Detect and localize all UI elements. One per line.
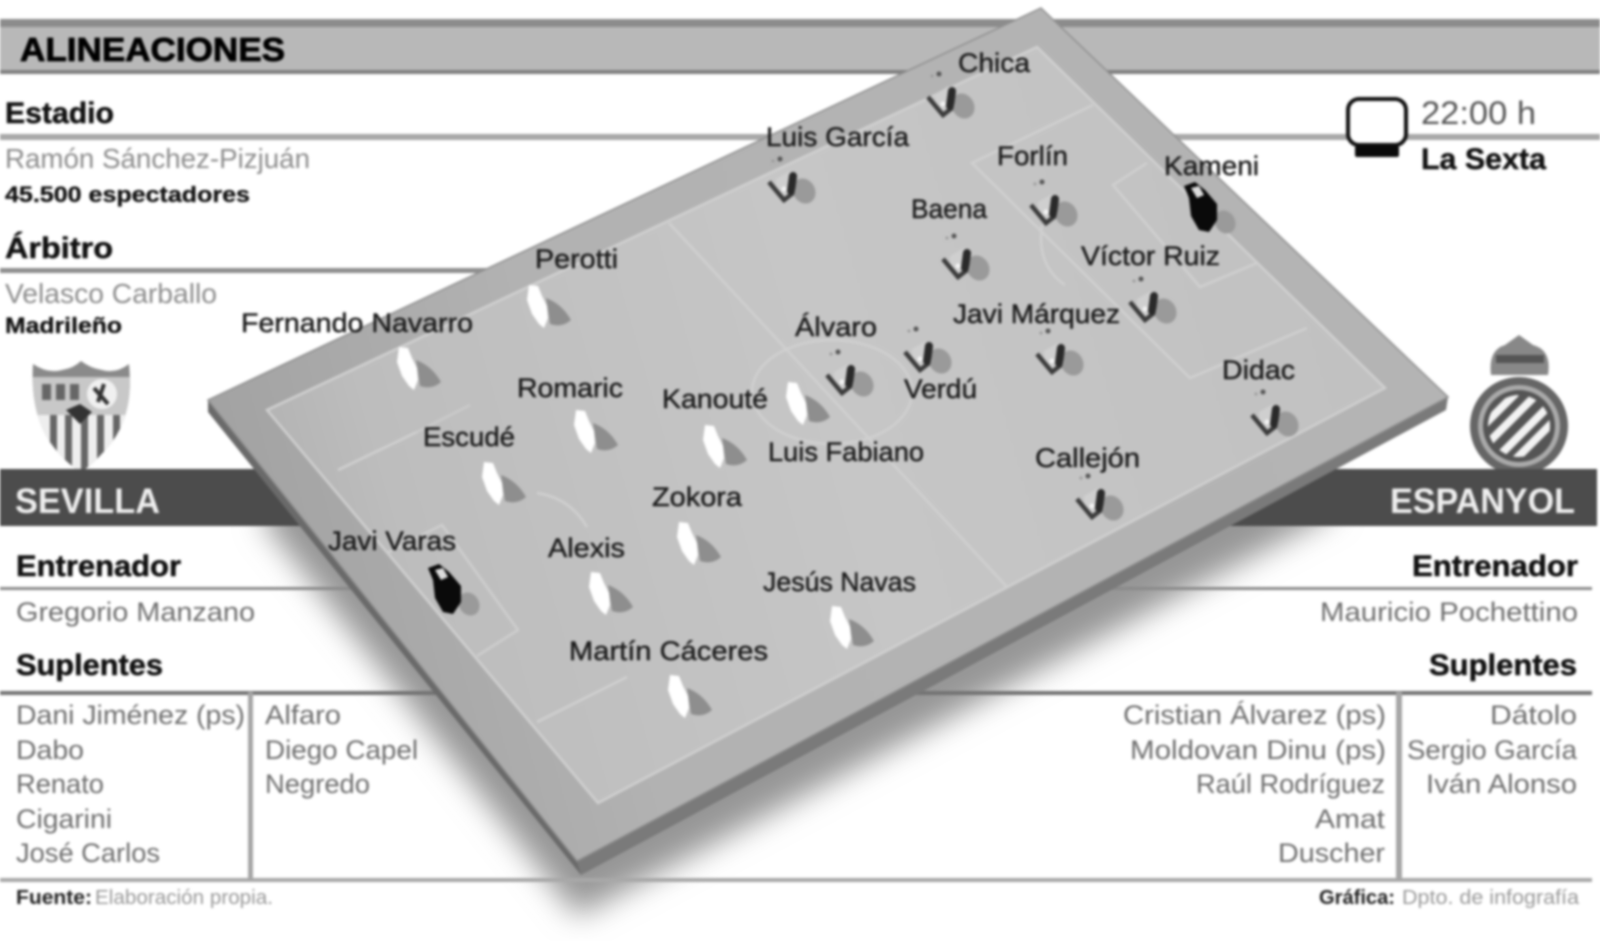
pitch markings — [267, 47, 1385, 803]
football pitch board — [208, 8, 1448, 875]
player: Kanouté: Kanouté — [662, 384, 768, 414]
substitutes column 2: Alfaro — [265, 700, 341, 730]
player: Jesús Navas: Jesús Navas — [763, 567, 916, 597]
player: Zokora: Zokora — [652, 482, 743, 512]
coach name: Mauricio Pochettino — [1320, 597, 1578, 627]
player: Callejón — [1035, 443, 1140, 525]
substitutes column 2: Iván Alonso — [1426, 769, 1577, 799]
player: Perotti — [527, 244, 618, 328]
player: Zokora — [652, 482, 743, 565]
player: Javi Márquez: Javi Márquez — [953, 299, 1120, 329]
source credit — [16, 887, 273, 909]
header band — [0, 19, 1600, 74]
player: Víctor Ruiz — [1081, 241, 1220, 328]
player: Romaric — [517, 373, 623, 453]
player: Álvaro — [795, 312, 878, 401]
panel: Espanyol staff and substitutes — [1123, 550, 1578, 868]
player: Fernando Navarro — [241, 308, 473, 390]
player: Martín Cáceres: Martín Cáceres — [569, 636, 768, 666]
player: Chica: Chica — [958, 48, 1031, 78]
substitutes column 1: Raúl Rodríguez — [1196, 769, 1385, 799]
panel: match info — [0, 97, 1600, 338]
substitutes column 2 — [1407, 700, 1578, 799]
icon: Sevilla crest — [30, 361, 135, 475]
player: Luis García: Luis García — [766, 122, 910, 152]
panel: Sevilla staff and substitutes — [16, 550, 418, 868]
substitutes column 2: Sergio García — [1407, 735, 1578, 765]
player: Javi Varas — [328, 526, 484, 619]
player: Kameni — [1164, 151, 1259, 237]
substitutes column 1 — [1123, 700, 1386, 868]
stadium heading: Estadio — [5, 97, 114, 130]
player: Álvaro: Álvaro — [795, 312, 877, 342]
grass surface — [267, 47, 1385, 803]
substitutes column 1: Cigarini — [16, 804, 112, 834]
source credit: Elaboración propia. — [95, 887, 273, 909]
player: Romaric: Romaric — [517, 373, 623, 403]
substitutes column 2 — [265, 700, 418, 799]
player: Javi Márquez — [953, 299, 1120, 380]
pitch drop shadow — [262, 440, 1336, 916]
graphic credit: Dpto. de infografía — [1402, 887, 1580, 909]
player: Luis García — [766, 122, 910, 208]
player: Perotti: Perotti — [535, 244, 618, 274]
title: ALINEACIONES — [20, 31, 285, 68]
icon: television — [1348, 99, 1406, 157]
substitutes column 2: Diego Capel — [265, 735, 418, 765]
substitutes column 1 — [16, 700, 245, 868]
source credit: Fuente: — [16, 887, 92, 909]
broadcaster: La Sexta — [1421, 143, 1546, 176]
icon: Espanyol crest — [1470, 335, 1568, 475]
coach heading: Entrenador — [1412, 550, 1578, 583]
coach name: Gregorio Manzano — [16, 597, 255, 627]
substitutes column 1: Duscher — [1278, 838, 1385, 868]
player: Kameni: Kameni — [1164, 151, 1259, 181]
substitutes column 1: Amat — [1315, 804, 1386, 834]
graphic credit: Gráfica: — [1319, 887, 1395, 909]
coach heading: Entrenador — [16, 550, 181, 583]
stadium name: Ramón Sánchez-Pizjuán — [5, 143, 310, 174]
substitutes column 1: Moldovan Dinu (ps) — [1130, 735, 1386, 765]
panel: lineup lines — [0, 587, 1592, 882]
player: Luis Fabiano: Luis Fabiano — [768, 437, 924, 467]
player: Forlín — [997, 141, 1082, 231]
team name: Espanyol: ESPANYOL — [1390, 482, 1575, 521]
player: Kanouté — [662, 384, 768, 468]
player: Alexis — [548, 533, 633, 615]
player: Fernando Navarro: Fernando Navarro — [241, 308, 473, 338]
graphic credit — [1319, 887, 1580, 909]
player: Callejón: Callejón — [1035, 443, 1140, 473]
substitutes column 1: José Carlos — [16, 838, 160, 868]
player: Forlín: Forlín — [997, 141, 1068, 171]
player: Jesús Navas — [763, 567, 916, 649]
substitutes column 1: Cristian Álvarez (ps) — [1123, 700, 1386, 730]
player: Didac — [1222, 355, 1303, 441]
player: Alexis: Alexis — [548, 533, 625, 563]
player: Víctor Ruiz: Víctor Ruiz — [1081, 241, 1220, 271]
referee name: Velasco Carballo — [5, 278, 217, 309]
substitutes column 2: Dátolo — [1490, 700, 1577, 730]
player: Baena: Baena — [911, 194, 988, 224]
player: Javi Varas: Javi Varas — [328, 526, 456, 556]
team name: Sevilla: SEVILLA — [15, 482, 160, 521]
substitutes heading: Suplentes — [16, 649, 163, 682]
player: Didac: Didac — [1222, 355, 1295, 385]
referee heading: Árbitro — [5, 231, 113, 265]
capacity: 45.500 espectadores — [5, 182, 250, 207]
dark team bar — [0, 469, 1597, 526]
referee origin: Madrileño — [5, 313, 122, 338]
player: Baena — [911, 194, 994, 285]
player: Verdú — [904, 326, 977, 404]
player: Escudé: Escudé — [423, 422, 515, 452]
player: Luis Fabiano — [768, 382, 924, 467]
substitutes column 1: Renato — [16, 769, 104, 799]
player: Verdú: Verdú — [904, 374, 977, 404]
broadcast time: 22:00 h — [1421, 95, 1536, 131]
substitutes column 1: Dani Jiménez (ps) — [16, 700, 245, 730]
substitutes column 1: Dabo — [16, 735, 84, 765]
player: Chica — [928, 48, 1031, 123]
substitutes column 2: Negredo — [265, 769, 370, 799]
player: Escudé — [423, 422, 526, 505]
substitutes heading: Suplentes — [1429, 649, 1577, 682]
player: Martín Cáceres — [569, 636, 768, 718]
